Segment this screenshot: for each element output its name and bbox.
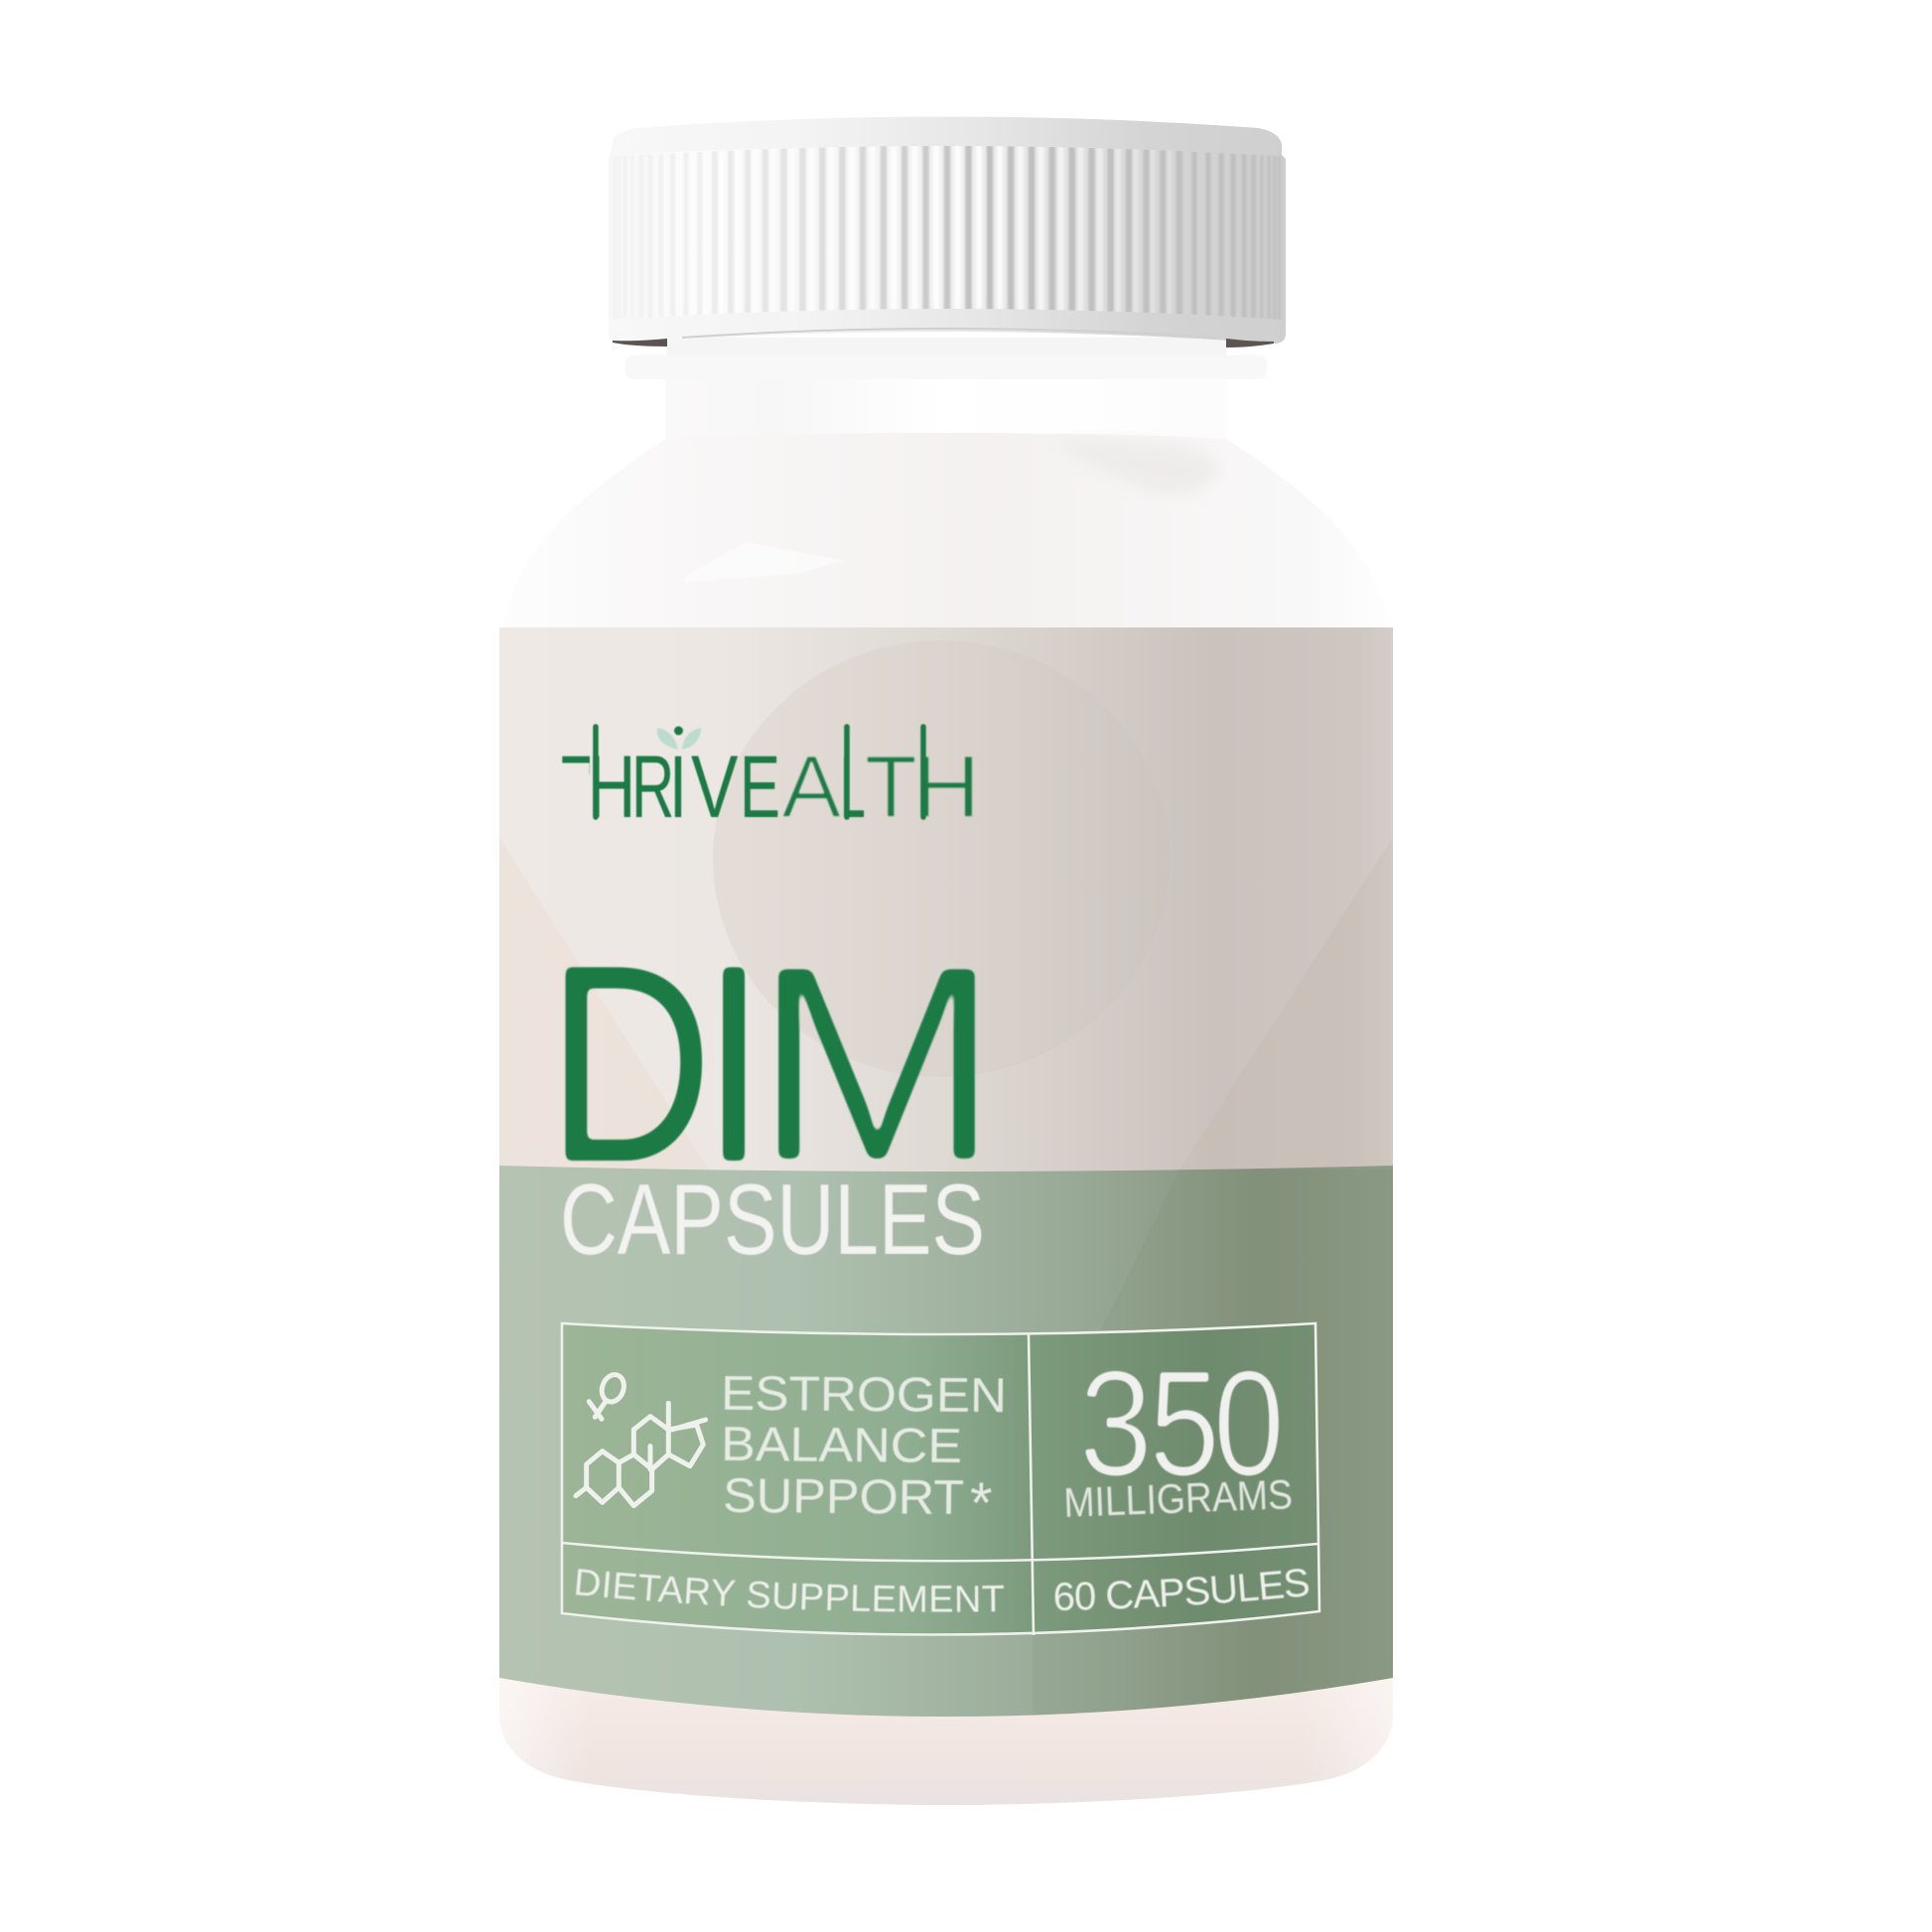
logo wordmark: L xyxy=(840,737,866,836)
logo wordmark: H xyxy=(588,738,635,836)
cap top rim xyxy=(613,117,1282,155)
green decorative wedge xyxy=(1033,1170,1393,1757)
bottle base xyxy=(499,1676,1393,1805)
dosage: 350: 5 xyxy=(1149,1338,1220,1507)
bottle xyxy=(499,338,1393,1805)
cap body xyxy=(609,117,1286,344)
title: DIM xyxy=(547,905,1002,1221)
right decorative wedge xyxy=(1179,837,1393,1170)
logo wordmark: H xyxy=(913,738,980,836)
logo leaves xyxy=(657,727,701,750)
left decorative wedge xyxy=(500,838,574,955)
cap ribs xyxy=(649,146,1281,320)
logo wordmark: E xyxy=(740,739,780,837)
logo wordmark: V xyxy=(691,738,739,837)
info box xyxy=(560,1322,1320,1636)
shoulder highlight xyxy=(685,542,844,582)
claim text: BALANCE xyxy=(721,1418,962,1473)
logo wordmark: T xyxy=(865,738,917,836)
icon: molecule with female symbol xyxy=(576,1372,706,1506)
dosage: 350 xyxy=(1079,1338,1285,1508)
logo wordmark: I xyxy=(669,738,687,836)
cap lower shadow line xyxy=(682,329,1218,338)
icon: steroid skeleton xyxy=(576,1403,706,1506)
dosage: 350: 3 xyxy=(1079,1339,1153,1508)
dosage unit: MILLIGRAMS xyxy=(1063,1471,1294,1527)
cap xyxy=(609,117,1286,347)
logo wordmark xyxy=(562,755,973,818)
icon: female symbol xyxy=(589,1372,627,1419)
capsule count text: 60 CAPSULES xyxy=(1054,1569,1310,1611)
title: DIM: M xyxy=(753,905,1002,1220)
claim text: ESTROGEN xyxy=(721,1367,1007,1423)
claim text: SUPPORT xyxy=(723,1469,964,1525)
title: DIM: I xyxy=(701,907,766,1221)
logo tall stems xyxy=(596,727,923,817)
claim text: * xyxy=(970,1471,993,1536)
title: DIM: D xyxy=(547,906,713,1220)
logo wordmark: T xyxy=(560,738,629,836)
neck ring xyxy=(667,338,1226,355)
bottle body xyxy=(499,377,1393,1805)
logo wordmark: A xyxy=(781,739,842,837)
logo wordmark: R xyxy=(631,738,674,837)
label xyxy=(499,627,1393,1717)
box grid lines xyxy=(562,1323,1319,1635)
box fill xyxy=(562,1323,1319,1635)
subtitle: CAPSULES: CAPSULES xyxy=(560,1165,985,1276)
flange xyxy=(625,355,1267,379)
label green panel xyxy=(499,1166,1393,1757)
shoulder shadow xyxy=(1052,441,1218,494)
dietary supplement text: DIETARY SUPPLEMENT xyxy=(576,1569,1005,1612)
cap gap left xyxy=(613,339,667,346)
dosage: 350: 0 xyxy=(1213,1338,1285,1507)
label beige panel xyxy=(499,627,1393,1757)
claim text xyxy=(721,1367,1007,1536)
cap lower band xyxy=(609,309,1286,344)
label decorative circle xyxy=(713,652,872,1066)
cap gap right xyxy=(1226,339,1274,347)
bottle neck xyxy=(666,377,1226,439)
logo: Thrivealth xyxy=(562,723,973,820)
